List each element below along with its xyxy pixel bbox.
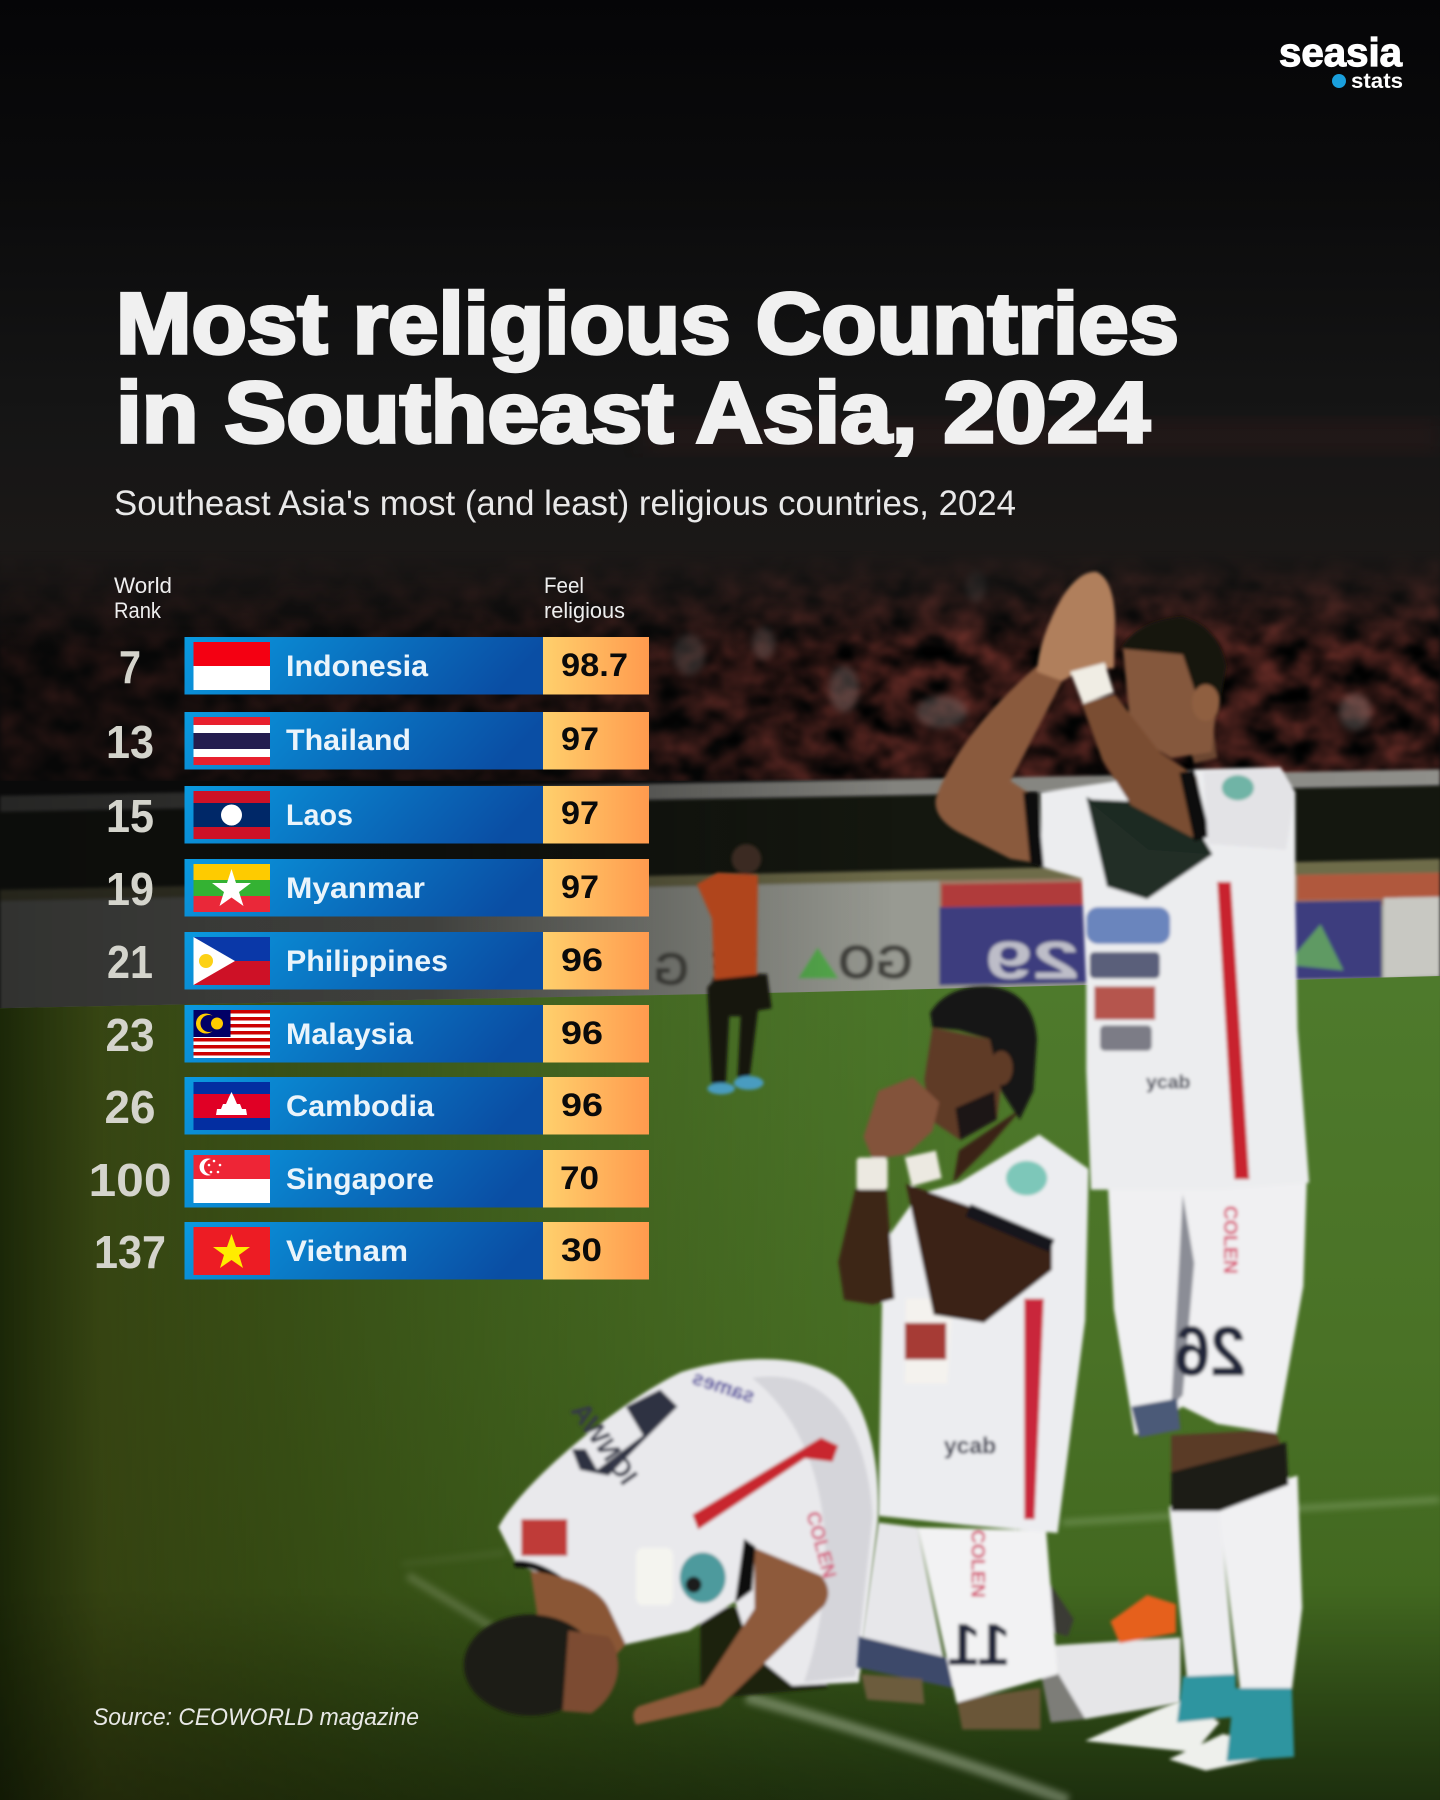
column header: feel religious: Feel xyxy=(544,573,584,598)
row: Thailand: Thailand xyxy=(286,724,411,757)
column header: feel religious xyxy=(544,573,625,623)
background photo: stadium and pitch: 29 xyxy=(985,930,1079,990)
row: Laos xyxy=(106,786,649,844)
row: Singapore xyxy=(88,1150,649,1208)
row: Singapore: 100 xyxy=(88,1154,172,1206)
photo: kneeling player: ycab xyxy=(944,1433,996,1459)
photo: bowing player: IONWA xyxy=(565,1396,644,1490)
background photo: stadium and pitch: GO xyxy=(838,935,913,989)
row: Vietnam: 30 xyxy=(561,1232,602,1268)
row: Vietnam: 137 xyxy=(94,1226,166,1278)
row: Malaysia: 96 xyxy=(561,1015,603,1051)
row: Laos: Laos xyxy=(286,799,353,832)
photo: kneeling player: 11 xyxy=(947,1611,1011,1678)
row: Myanmar xyxy=(106,859,649,916)
row: Singapore: Singapore xyxy=(286,1163,434,1196)
row: Malaysia xyxy=(106,1005,649,1062)
row: Thailand: 97 xyxy=(561,721,599,757)
row: Laos: 15 xyxy=(106,790,154,842)
row: Myanmar: 97 xyxy=(561,869,599,905)
photo: bowing player: sames xyxy=(689,1366,758,1408)
row: Thailand xyxy=(106,712,649,770)
background photo: distant player xyxy=(697,844,772,1094)
row: Vietnam xyxy=(94,1222,649,1280)
photo: bowing player xyxy=(464,1359,878,1725)
row: Philippines: Philippines xyxy=(286,945,448,978)
row: Philippines xyxy=(107,932,649,990)
row: Indonesia: Indonesia xyxy=(286,650,428,683)
photo: standing player: ycab xyxy=(1146,1072,1191,1094)
photo: kneeling player: COLEN xyxy=(966,1530,988,1598)
column header: world rank xyxy=(114,573,172,623)
row: Cambodia: Cambodia xyxy=(286,1090,434,1123)
photo: standing player: 26 xyxy=(1174,1313,1246,1391)
logo: seasia stats: seasia xyxy=(1279,31,1403,75)
row: Cambodia: 96 xyxy=(561,1087,603,1123)
background photo: stadium and pitch: G xyxy=(653,943,689,995)
photo: kneeling player xyxy=(838,986,1180,1729)
title xyxy=(116,276,1179,461)
row: Singapore: 70 xyxy=(560,1160,599,1196)
column header: feel religious: religious xyxy=(544,598,625,623)
title: in Southeast Asia, 2024 xyxy=(116,365,1150,461)
logo: seasia stats: stats xyxy=(1351,70,1403,93)
source note: Source: CEOWORLD magazine xyxy=(93,1704,419,1731)
row: Thailand: 13 xyxy=(106,716,154,768)
column header: world rank: World xyxy=(114,573,172,598)
row: Laos: 97 xyxy=(561,795,599,831)
background photo: stadium and pitch: JE xyxy=(710,944,764,992)
row: Myanmar: 19 xyxy=(106,863,154,915)
row: Indonesia xyxy=(119,637,649,694)
row: Philippines: 96 xyxy=(561,942,603,978)
row: Malaysia: 23 xyxy=(106,1009,154,1061)
row: Myanmar: Myanmar xyxy=(286,872,425,905)
ranking table xyxy=(88,637,649,1280)
row: Vietnam: Vietnam xyxy=(286,1235,408,1268)
row: Cambodia: 26 xyxy=(104,1081,156,1133)
row: Cambodia xyxy=(104,1077,649,1134)
photo: bowing player: COLEN xyxy=(801,1509,840,1581)
photo: standing player xyxy=(935,572,1309,1771)
photo: standing player: COLEN xyxy=(1219,1206,1241,1274)
row: Indonesia: 7 xyxy=(119,641,141,693)
subtitle: Southeast Asia's most (and least) religious countries, 2024 xyxy=(114,484,1016,523)
title: Most religious Countries xyxy=(116,276,1179,372)
row: Philippines: 21 xyxy=(107,936,153,988)
row: Malaysia: Malaysia xyxy=(286,1018,413,1051)
column header: world rank: Rank xyxy=(114,598,162,623)
row: Indonesia: 98.7 xyxy=(561,647,628,683)
